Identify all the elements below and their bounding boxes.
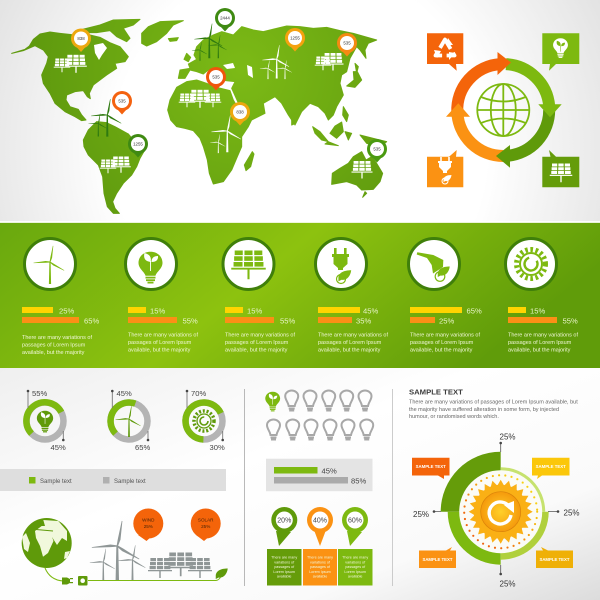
icon: fuel nozzle <box>417 252 450 281</box>
donut charts <box>26 402 222 440</box>
map pins: 1255 <box>133 142 143 146</box>
band values: 65% <box>84 316 99 326</box>
pin text boxes: variations of <box>274 560 295 564</box>
band paragraphs: passages of Lorem Ipsum <box>318 340 382 346</box>
legend band: Sample text <box>40 479 72 485</box>
band values <box>59 306 578 326</box>
band values: 15% <box>530 306 545 316</box>
bulb box <box>542 33 579 71</box>
icon: plug <box>332 248 351 284</box>
dividers <box>243 389 246 586</box>
donut labels: 45% <box>50 443 66 452</box>
pin text boxes: passages of <box>345 565 366 569</box>
map turbines white <box>210 45 292 153</box>
wind bubble: 25% <box>144 524 153 529</box>
leaf <box>216 568 228 579</box>
map pins: 1255 <box>290 36 300 40</box>
percentage bar panel: 45% <box>322 466 337 476</box>
scene turbines <box>90 521 146 580</box>
power cord <box>45 568 222 581</box>
percentage bar panel <box>266 459 372 491</box>
arctic islands <box>80 19 140 42</box>
radial labels <box>413 432 580 588</box>
band paragraphs: available, but the majority <box>22 350 85 356</box>
heading: SAMPLE TEXT <box>409 388 463 396</box>
map pins: 535 <box>373 146 381 152</box>
wind bubble <box>133 508 163 541</box>
pin text boxes: Lorem Ipsum <box>344 570 366 574</box>
location pins: 40% <box>313 518 327 524</box>
green band <box>0 222 600 368</box>
band paragraphs: passages of Lorem Ipsum <box>225 340 289 346</box>
band paragraphs: available, but the majority <box>508 348 571 354</box>
islands <box>184 53 387 197</box>
arrows <box>457 64 549 156</box>
callouts: SAMPLE TEXT <box>416 464 446 469</box>
legend band: Sample text <box>114 479 146 485</box>
pin text boxes: available <box>348 575 362 579</box>
band paragraphs: There are many variations of <box>22 335 92 341</box>
radial sun chart <box>441 452 549 565</box>
background <box>0 0 600 222</box>
globe icon <box>477 84 529 136</box>
pin text boxes: Lorem Ipsum <box>273 570 295 574</box>
band values: 25% <box>59 306 74 316</box>
callouts: SAMPLE TEXT <box>422 557 453 562</box>
band paragraphs: passages of Lorem Ipsum <box>22 342 86 348</box>
band paragraphs: passages of Lorem Ipsum <box>508 340 572 346</box>
percentage bar panel: 85% <box>351 476 366 486</box>
donut labels: 55% <box>32 389 47 398</box>
radial labels: 25% <box>500 580 516 588</box>
pin text boxes: variations of <box>310 560 331 564</box>
pin text boxes <box>267 549 372 586</box>
plug box <box>427 150 463 187</box>
radial labels: 25% <box>564 508 580 518</box>
icon: turbine <box>33 246 65 284</box>
band values: 45% <box>363 306 378 316</box>
map pins: 535 <box>118 98 126 104</box>
radial leaders <box>434 443 558 574</box>
map pins: 2444 <box>220 16 230 20</box>
band paragraphs: There are many variations of <box>225 332 295 338</box>
callouts: SAMPLE TEXT <box>539 557 570 562</box>
radial labels: 25% <box>413 510 429 519</box>
earth globe <box>22 518 72 568</box>
location pins: 60% <box>348 518 362 524</box>
pin text boxes: variations of <box>345 560 366 564</box>
solar bubble: SOLAR <box>198 518 214 522</box>
band paragraphs: available, but the majority <box>225 348 288 354</box>
callouts: SAMPLE TEXT <box>536 464 566 469</box>
map turbines dark <box>88 23 227 137</box>
donut leaders <box>28 391 223 440</box>
pin text boxes: There are many <box>307 556 333 560</box>
map pins <box>71 8 387 162</box>
pin text boxes: Lorem Ipsum <box>309 570 331 574</box>
band values: 55% <box>562 316 578 326</box>
africa <box>168 80 254 184</box>
donut labels: 65% <box>135 443 150 452</box>
band icon circles <box>24 238 556 290</box>
recycle box <box>427 33 463 71</box>
band paragraphs: passages of Lorem Ipsum <box>410 340 474 346</box>
cycle diagram <box>427 33 579 187</box>
map water cutouts <box>94 43 253 78</box>
location pins: 20% <box>277 518 291 524</box>
pin text boxes: There are many <box>271 556 297 560</box>
band paragraphs: available, but the majority <box>410 348 473 354</box>
solar box <box>542 150 579 187</box>
location pins <box>271 507 368 546</box>
band paragraphs: available, but the majority <box>318 348 381 354</box>
donut labels <box>32 389 225 452</box>
wind bubble: WIND <box>142 518 155 522</box>
solar bubble: 25% <box>201 524 210 529</box>
map pins: 838 <box>236 110 244 114</box>
radial labels: 25% <box>500 432 516 442</box>
paragraph: There are many variations of passages of Lorem Ipsum available, but <box>409 400 578 406</box>
band values: 65% <box>466 306 482 316</box>
map pins: 535 <box>343 40 351 46</box>
map solar panels <box>54 53 372 178</box>
pin text boxes: passages of <box>310 565 331 569</box>
australia <box>332 152 383 190</box>
solar bubble <box>191 508 221 541</box>
band paragraphs <box>22 332 578 356</box>
pin text boxes: available <box>277 575 291 579</box>
pin text boxes: available <box>313 575 327 579</box>
donut labels: 30% <box>210 443 225 452</box>
greenland <box>142 21 183 46</box>
legend band <box>0 469 226 491</box>
band values: 35% <box>356 316 371 326</box>
icon: bulb <box>138 252 162 284</box>
world map <box>12 19 387 213</box>
band paragraphs: There are many variations of <box>410 332 480 338</box>
eurasia <box>178 26 377 125</box>
north america <box>12 32 128 121</box>
band values: 25% <box>439 316 454 326</box>
pin text boxes: There are many <box>342 556 368 560</box>
band paragraphs: passages of Lorem Ipsum <box>128 340 192 346</box>
south america <box>83 122 147 213</box>
icon: solar panel <box>231 250 266 279</box>
icon: gear <box>516 250 546 278</box>
pin text boxes: passages of <box>274 565 295 569</box>
band values: 15% <box>247 306 262 316</box>
map pins: 838 <box>77 36 85 41</box>
donut labels: 45% <box>116 389 132 398</box>
bulb grid <box>265 390 373 440</box>
band values: 15% <box>150 306 165 316</box>
band values: 55% <box>280 316 295 326</box>
donut icons <box>37 406 141 437</box>
paragraph: the majority have suffered alteration in some form, by injected <box>409 407 559 413</box>
donut labels: 70% <box>191 389 206 398</box>
band values: 55% <box>182 316 198 326</box>
band bars <box>22 307 526 313</box>
band paragraphs: There are many variations of <box>128 332 198 338</box>
band paragraphs: There are many variations of <box>508 332 578 338</box>
iceland <box>168 38 178 41</box>
scene solar panels <box>148 552 212 578</box>
plug and socket <box>62 576 88 586</box>
band paragraphs: There are many variations of <box>318 332 388 338</box>
map pins: 535 <box>212 74 220 80</box>
callouts <box>412 458 573 568</box>
band paragraphs: available, but the majority <box>128 348 191 354</box>
paragraph: humour, or randomised words which. <box>409 414 499 420</box>
